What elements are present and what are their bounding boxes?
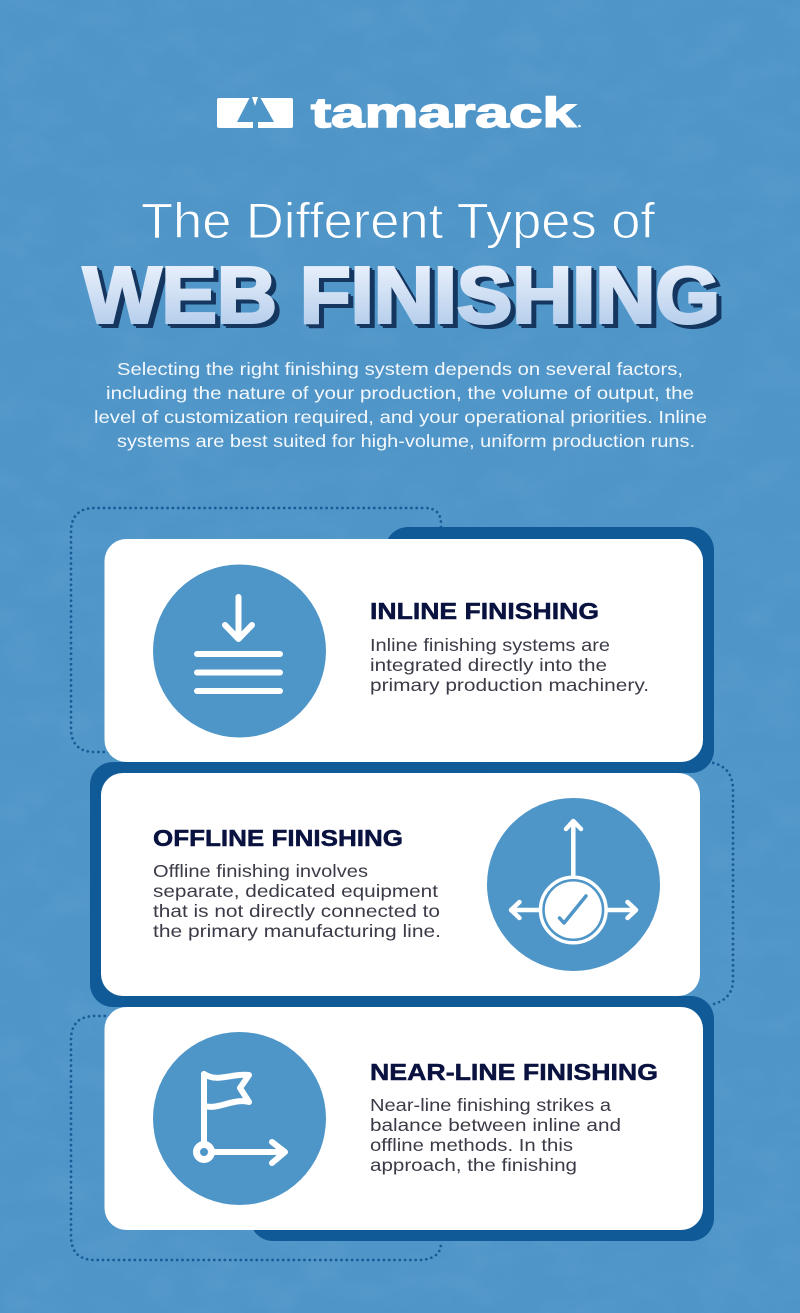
text: inline description: primary production machinery.	[370, 675, 649, 695]
text: offline description	[153, 861, 441, 941]
title: WEB FINISHING: WEB FINISHING	[88, 254, 725, 344]
heading: offline finishing: OFFLINE FINISHING	[153, 825, 403, 851]
logo: tamarack: tamarack	[311, 89, 577, 136]
logo: tamarack	[217, 89, 581, 136]
heading: near-line finishing: NEAR-LINE FINISHING	[370, 1059, 658, 1085]
title: WEB FINISHING: WEB FINISHING	[83, 250, 720, 340]
icon: flag with arrow	[153, 1032, 326, 1205]
intro paragraph: Selecting the right finishing system depends on several factors,	[117, 359, 683, 379]
text: near-line description: Near-line finishing strikes a	[370, 1095, 611, 1115]
intro paragraph	[94, 359, 707, 451]
panel: near-line finishing	[104, 1007, 703, 1230]
icon: arrow into stacked lines	[153, 564, 326, 738]
text: near-line description: offline methods. In this	[370, 1135, 573, 1155]
heading: inline finishing: INLINE FINISHING	[370, 598, 599, 624]
intro paragraph: systems are best suited for high-volume, uniform production runs.	[117, 431, 695, 451]
text: inline description: Inline finishing systems are	[370, 635, 610, 655]
title: WEB FINISHING: WEB FINISHING	[86, 252, 722, 342]
dotted connector: near-line	[71, 1016, 441, 1260]
text: inline description	[370, 635, 649, 695]
card backing: near-line	[250, 996, 714, 1241]
text: offline description: the primary manufacturing line.	[153, 921, 441, 941]
text: offline description: that is not directly connected to	[153, 901, 440, 921]
text: near-line description: balance between inline and	[370, 1115, 621, 1135]
text: near-line description: approach, the finishing	[370, 1155, 577, 1175]
dotted connector: offline	[708, 762, 733, 1005]
card backing: offline	[90, 762, 490, 1007]
text: inline description: integrated directly into the	[370, 655, 607, 675]
text: offline description: separate, dedicated equipment	[153, 881, 438, 901]
text: near-line description	[370, 1095, 621, 1175]
intro paragraph: including the nature of your production, the volume of output, the	[106, 383, 694, 403]
card backing: inline	[385, 527, 714, 773]
dotted connector: inline	[71, 508, 441, 752]
icon: check with three arrows	[487, 798, 660, 971]
text: offline description: Offline finishing involves	[153, 861, 368, 881]
intro paragraph: level of customization required, and your operational priorities. Inline	[94, 407, 707, 427]
panel: offline finishing	[101, 773, 700, 996]
panel: inline finishing	[104, 539, 703, 762]
title line: The Different Types of: The Different Types of	[141, 193, 655, 249]
